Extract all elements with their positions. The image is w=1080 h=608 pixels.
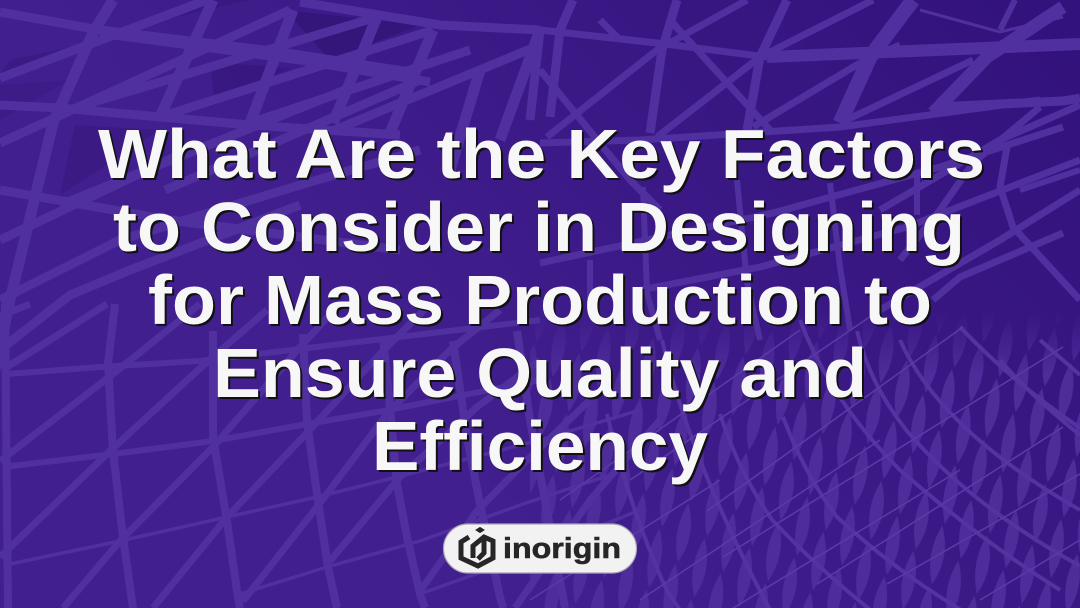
logo pill background [444,524,636,573]
title: to Consider in Designing [113,188,965,266]
title: Efficiency [372,407,708,485]
logo badge [444,524,636,573]
top-left struts [0,0,540,350]
title: for Mass Production to [148,261,932,339]
bottom-right curved ribs [607,320,1080,608]
title: What Are the Key Factors [98,115,985,193]
top-right struts [540,0,1080,310]
logo wordmark: inorigin [503,533,621,565]
bottom-left lattice [5,304,565,608]
icon: inorigin hexagon mark [461,528,493,566]
title [98,115,985,485]
title: Ensure Quality and [213,334,867,412]
